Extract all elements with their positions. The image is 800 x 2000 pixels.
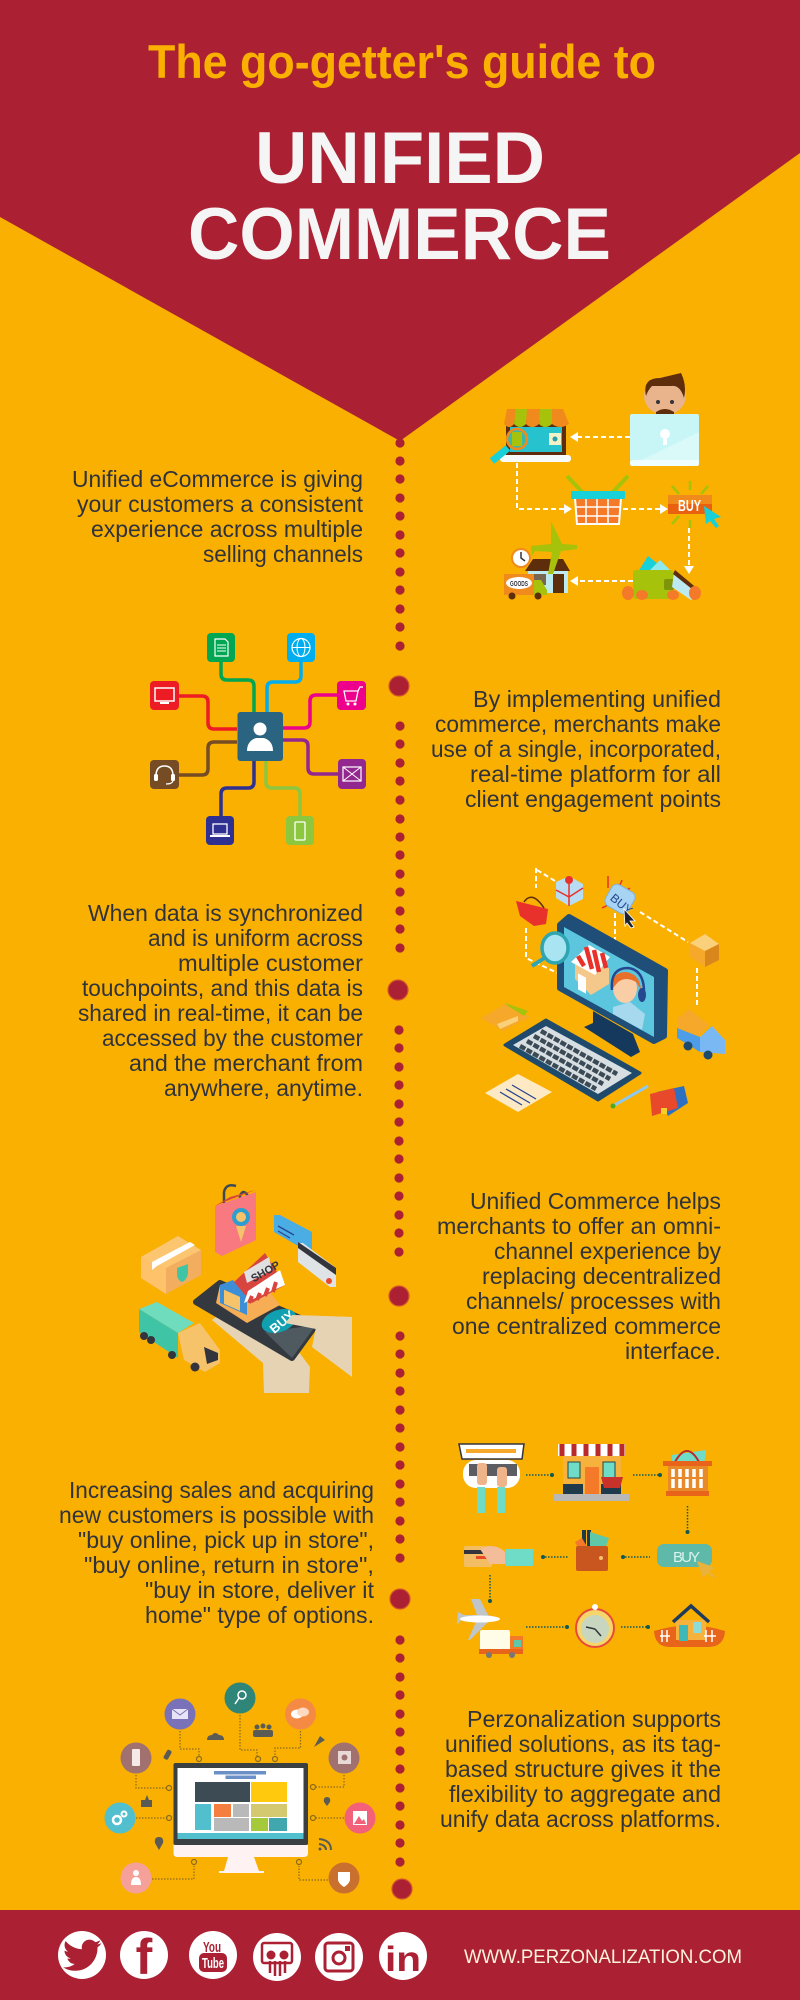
small grey glyphs	[141, 1724, 331, 1850]
text block 5: home" type of options.	[145, 1602, 374, 1628]
node: mail	[338, 759, 366, 789]
house on orange ground	[654, 1606, 725, 1647]
icon: search	[224, 1682, 256, 1714]
icon: shield	[328, 1862, 360, 1894]
text block 3: multiple customer	[178, 950, 363, 976]
node: phone	[286, 816, 314, 845]
credit card blue	[274, 1215, 312, 1254]
dotted connectors	[490, 1475, 688, 1627]
text block 2: real-time platform for all	[470, 761, 721, 787]
icon: user	[120, 1862, 152, 1894]
node: headset	[150, 760, 179, 789]
text block 4: interface.	[625, 1338, 721, 1364]
central user tile	[238, 712, 283, 761]
text block 4: replacing decentralized	[482, 1263, 721, 1289]
icon: chat	[285, 1698, 316, 1730]
wallet with cards	[575, 1530, 609, 1571]
title: commerce: COMMERCE	[188, 194, 611, 275]
icon: linkedin: in	[385, 1940, 421, 1979]
text block 2: use of a single, incorporated,	[431, 736, 721, 762]
text block 3	[78, 900, 363, 1101]
header banner	[0, 0, 800, 441]
delivery house, plane and truck: GOODS	[510, 581, 528, 588]
text block 1: your customers a consistent	[77, 491, 364, 517]
laptop and typing hands	[459, 1444, 524, 1513]
illustration: connected website	[104, 1682, 376, 1894]
red basket	[516, 897, 548, 926]
text block 6: based structure gives it the	[445, 1756, 721, 1782]
buy tag with cursor: BUY	[607, 891, 635, 917]
teal buy button	[657, 1544, 716, 1578]
hand and phone: BUY	[267, 1307, 298, 1336]
clock	[576, 1604, 614, 1647]
node: globe	[287, 633, 315, 662]
title: unified: UNIFIED	[255, 118, 545, 199]
dashed network lines	[526, 868, 697, 1005]
buy tag with cursor	[602, 876, 637, 928]
text block 3: and the merchant from	[129, 1050, 363, 1076]
icon: image	[344, 1802, 376, 1834]
agent with headset	[612, 968, 646, 1030]
storefront	[554, 1444, 629, 1501]
basket with bags	[663, 1450, 712, 1496]
hand and phone	[196, 1283, 352, 1393]
icon: gears	[104, 1802, 136, 1834]
shopping basket	[567, 476, 628, 524]
node: laptop	[206, 816, 234, 845]
connector lines	[179, 662, 338, 816]
illustration: unified commerce flow	[492, 373, 721, 600]
text block 2: By implementing unified	[473, 686, 721, 712]
icon: video	[328, 1742, 360, 1774]
icon: instagram	[315, 1933, 363, 1981]
wallet	[481, 1003, 530, 1031]
text block 4	[437, 1188, 721, 1364]
node: cart	[337, 681, 366, 710]
monitor	[560, 917, 665, 1057]
icon: slideshare	[253, 1933, 301, 1981]
parcel box	[690, 934, 719, 967]
text block 4: one centralized commerce	[452, 1313, 721, 1339]
text block 3: and is uniform across	[148, 925, 363, 951]
text block 6: flexibility to aggregate and	[449, 1781, 721, 1807]
text block 4: channels/ processes with	[466, 1288, 721, 1314]
text block 6: unify data across platforms.	[440, 1806, 721, 1832]
text block 4: Unified Commerce helps	[470, 1188, 721, 1214]
buy button: BUY	[678, 498, 701, 515]
text block 3: accessed by the customer	[102, 1025, 363, 1051]
text block 1: Unified eCommerce is giving	[72, 466, 363, 492]
shop on phone	[216, 1253, 285, 1323]
man with laptop	[630, 373, 699, 466]
text block 5	[59, 1477, 375, 1628]
icon: phone	[120, 1742, 152, 1774]
parcel	[141, 1236, 201, 1294]
text block 6	[440, 1706, 721, 1832]
icon: mail	[164, 1698, 196, 1730]
text block 1: experience across multiple	[91, 516, 363, 542]
text block 2: client engagement points	[465, 786, 721, 812]
text block 2	[431, 686, 721, 812]
text block 4: channel experience by	[494, 1238, 721, 1264]
truck	[139, 1302, 220, 1372]
buy button	[668, 481, 721, 528]
icon: youtube	[189, 1931, 237, 1979]
dotted timeline	[388, 438, 412, 1899]
flow arrows	[517, 437, 689, 581]
credit cards	[650, 1086, 688, 1116]
icon: linkedin	[379, 1932, 427, 1980]
text block 6: unified solutions, as its tag-	[445, 1731, 721, 1757]
delivery truck	[677, 1009, 725, 1060]
text block 3: anywhere, anytime.	[164, 1075, 363, 1101]
store on screen	[571, 945, 610, 995]
text block 4: merchants to offer an omni-	[437, 1213, 721, 1239]
title: subtitle line: The go-getter's guide to	[148, 35, 656, 88]
illustration: phone shopping	[139, 1185, 352, 1393]
illustration: connected customer touchpoints	[150, 633, 366, 845]
shopping bag	[215, 1185, 256, 1256]
text block 5: "buy online, return in store",	[84, 1552, 374, 1578]
text block 5: "buy online, pick up in store",	[78, 1527, 374, 1553]
monitor	[174, 1763, 308, 1873]
text block 5: Increasing sales and acquiring	[69, 1477, 374, 1503]
text block 3: touchpoints, and this data is	[82, 975, 363, 1001]
teal buy button: BUY	[673, 1549, 700, 1566]
receipt	[485, 1074, 552, 1112]
text block 2: commerce, merchants make	[435, 711, 721, 737]
hand with credit card	[464, 1546, 533, 1567]
icon: facebook: f	[136, 1929, 153, 1985]
wallet with money and coins	[622, 556, 701, 600]
node: document	[207, 633, 235, 662]
arrow heads	[564, 432, 694, 586]
keyboard	[505, 1020, 640, 1100]
shop on phone: SHOP	[249, 1259, 282, 1285]
plane and truck	[457, 1599, 523, 1658]
node: monitor	[150, 681, 179, 710]
icon: youtube: You	[203, 1939, 221, 1956]
text block 3: shared in real-time, it can be	[78, 1000, 363, 1026]
delivery house, plane and truck	[504, 521, 577, 600]
gift box	[556, 876, 583, 906]
connector end dots	[488, 1473, 690, 1629]
icon: twitter	[58, 1931, 106, 1979]
pen	[610, 1086, 648, 1108]
text block 1	[72, 466, 364, 567]
connector rings	[166, 1756, 316, 1864]
text block 5: new customers is possible with	[59, 1502, 374, 1528]
illustration: purchase journey	[457, 1444, 725, 1658]
text block 1: selling channels	[203, 541, 363, 567]
icon: youtube: Tube	[202, 1955, 224, 1972]
website url: WWW.PERZONALIZATION.COM	[464, 1946, 742, 1968]
credit card white	[298, 1242, 336, 1287]
magnifier	[532, 933, 568, 966]
text block 3: When data is synchronized	[88, 900, 363, 926]
dotted connectors	[136, 1715, 344, 1880]
store on laptop	[492, 409, 571, 462]
footer bar	[0, 1910, 800, 2000]
text block 6: Perzonalization supports	[467, 1706, 721, 1732]
icon: facebook	[120, 1929, 168, 1985]
illustration: isometric computer store	[481, 868, 725, 1116]
text block 5: "buy in store, deliver it	[145, 1577, 375, 1603]
